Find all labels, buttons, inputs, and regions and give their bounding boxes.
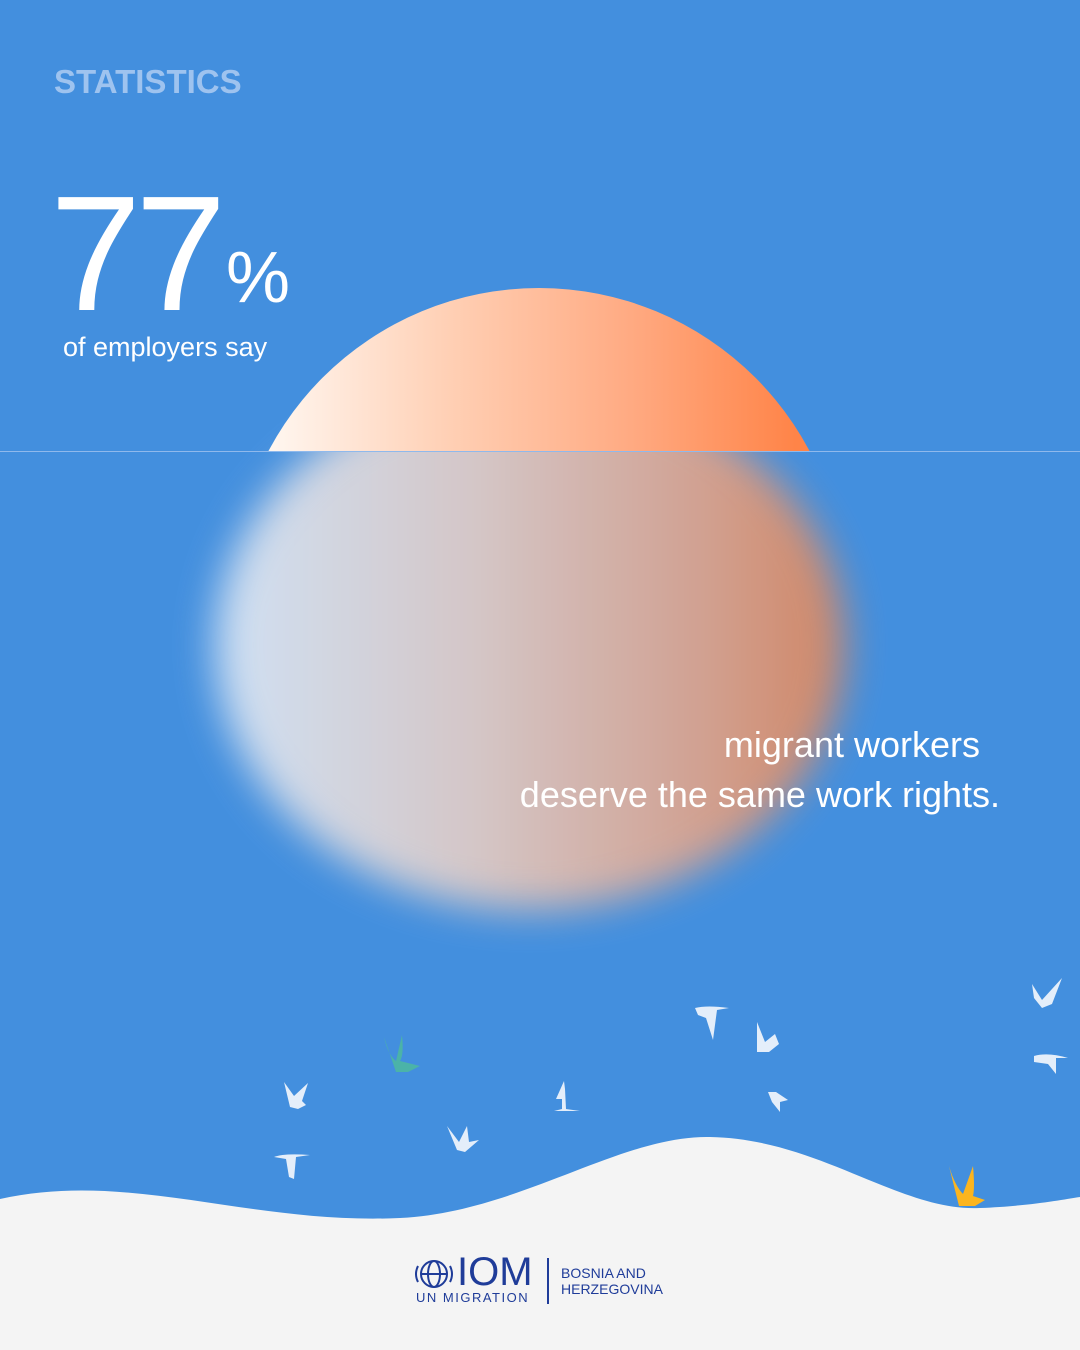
stat: 77%: % bbox=[226, 238, 290, 318]
sun bbox=[268, 288, 810, 451]
sun reflection bbox=[215, 380, 845, 910]
logo: BOSNIA AND bbox=[561, 1265, 646, 1281]
statement text: deserve the same work rights. bbox=[520, 774, 1000, 815]
statement text bbox=[520, 724, 1000, 815]
horizon line bbox=[0, 451, 1080, 452]
logo bbox=[415, 1250, 663, 1305]
logo: IOM bbox=[457, 1250, 533, 1294]
statement text: migrant workers bbox=[724, 724, 980, 765]
wave bbox=[0, 1137, 1080, 1350]
logo: HERZEGOVINA bbox=[561, 1281, 663, 1297]
title: statistics: STATISTICS bbox=[54, 63, 242, 100]
stat: 77%: 77 bbox=[50, 162, 220, 345]
stat: 77% bbox=[50, 162, 290, 362]
stat: 77%: of employers say bbox=[63, 332, 267, 362]
bird: yellow bbox=[949, 1166, 985, 1206]
logo: UN MIGRATION bbox=[416, 1290, 529, 1305]
bird: teal bbox=[384, 1035, 420, 1072]
